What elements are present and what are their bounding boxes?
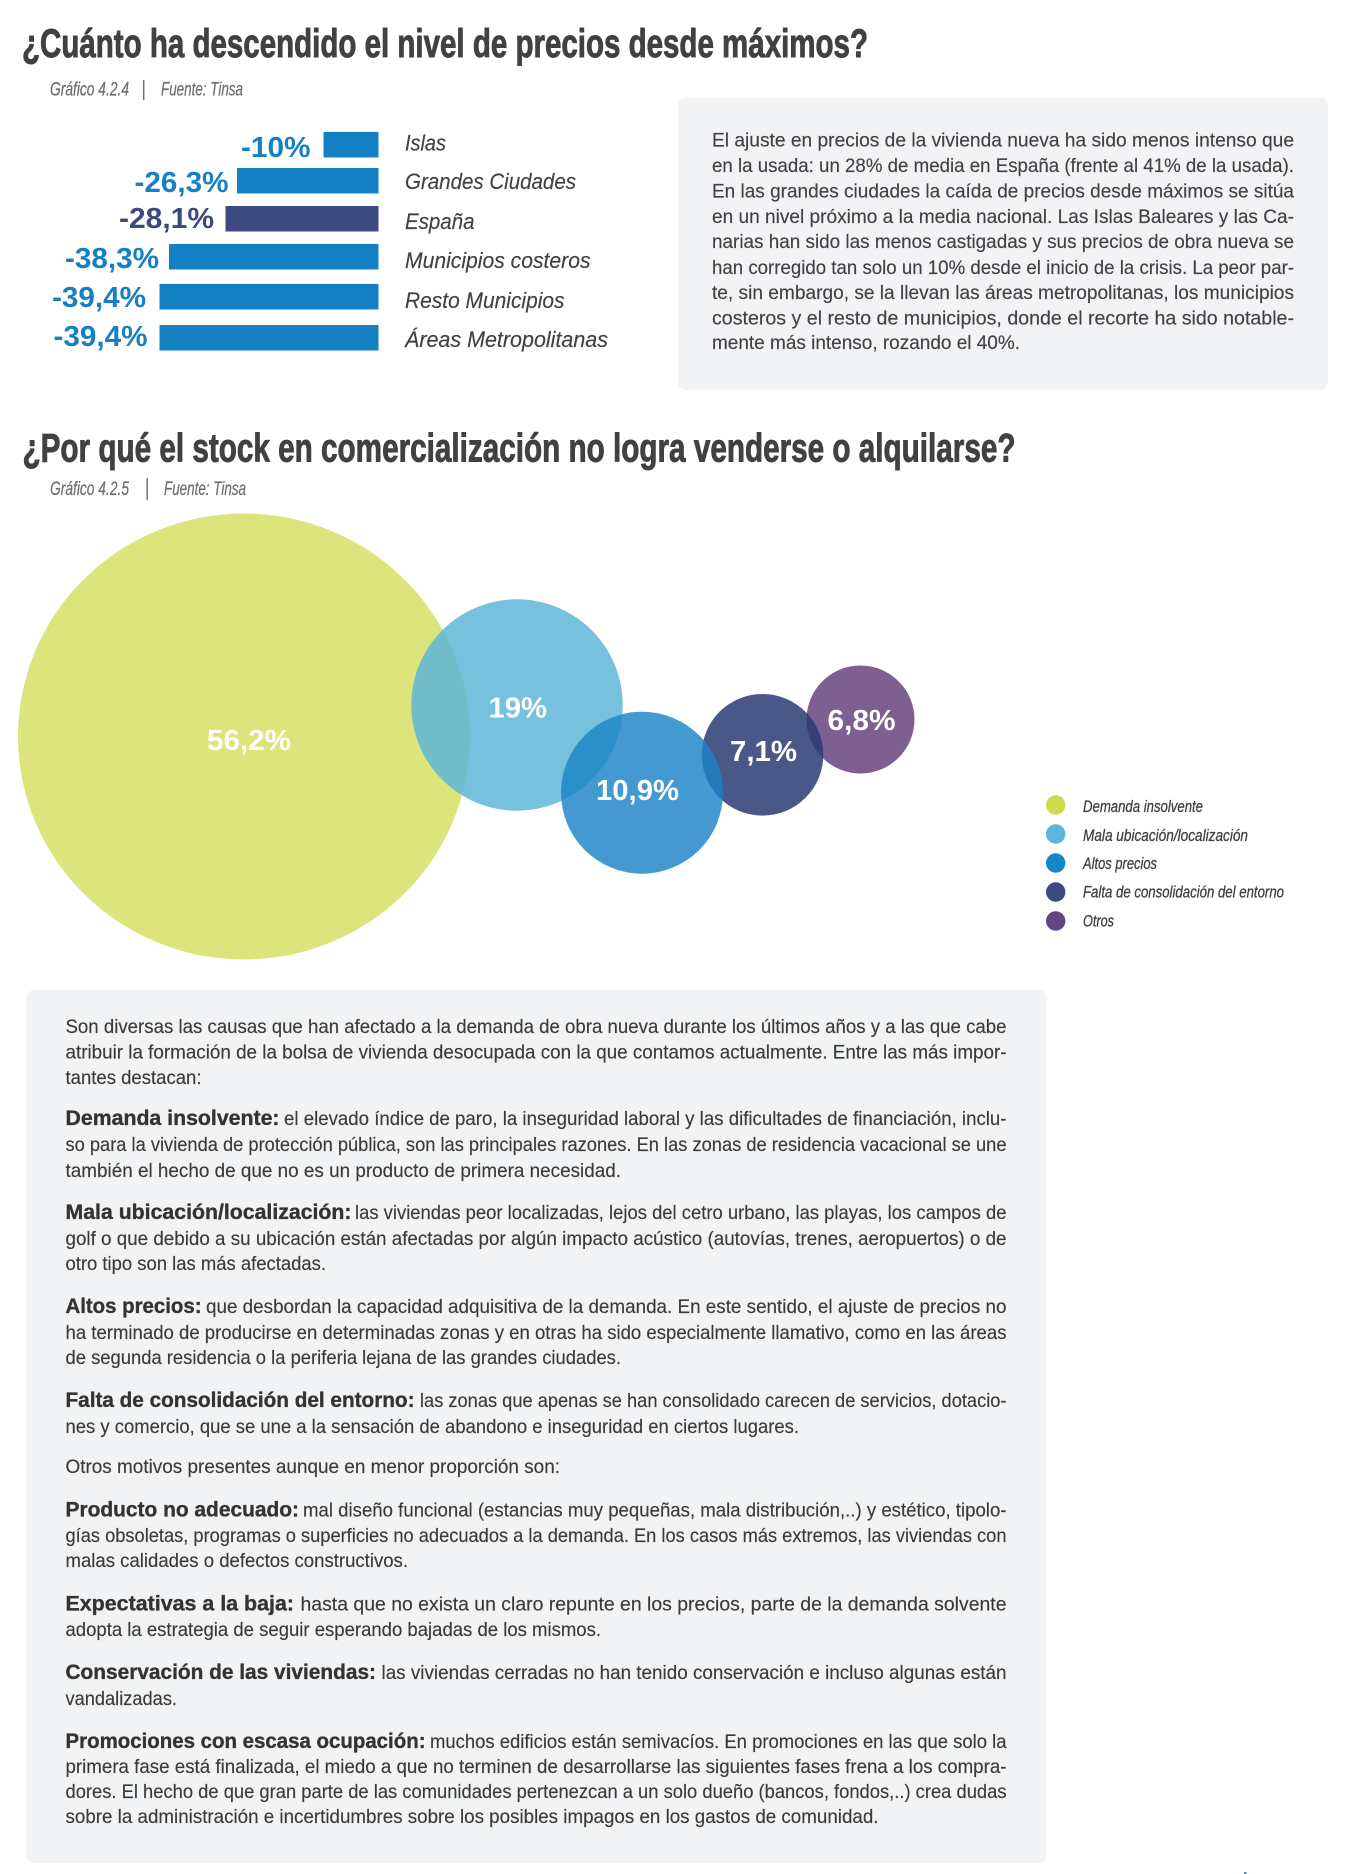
text block: Mala ubicación/localización: las viviendas peor localizadas, lejos del cetro urbano, las playas, los campos de [355,1202,1006,1224]
text block: Conservación de las viviendas: las viviendas cerradas no han tenido conservación e incluso algunas están [382,1662,1006,1684]
source line: chart 4.2.4: Gráfico 4.2.4 [50,80,129,100]
title: unsold stock: ¿Por qué el stock en comercialización no logra venderse o alquilarse? [22,426,1016,470]
legend item: Mala ubicación/localización: Mala ubicación/localización [1083,827,1248,845]
text block: Promociones con escasa ocupación [66,1730,1007,1828]
legend item: Demanda insolvente: Demanda insolvente [1083,798,1203,816]
text block: price commentary: han corregido tan solo un 10% desde el inicio de la crisis. La peor par- [712,257,1294,279]
text block: Altos precios: Altos precios: [66,1295,202,1318]
text block: Conservación de las viviendas [66,1661,1006,1710]
text block: price commentary: mente más intenso, rozando el 40%. [712,332,1020,354]
text block: Altos precios: ha terminado de producirse en determinadas zonas y en otras ha sido especialmente llamativo, como en las áreas [66,1322,1007,1344]
text block: Demanda insolvente: Demanda insolvente: [66,1107,280,1130]
bubble: Falta de consolidación 7,1% [702,694,823,816]
text block: Demanda insolvente: también el hecho de que no es un producto de primera necesidad. [66,1160,621,1182]
bar row: España: España [405,209,474,234]
text block: Promociones con escasa ocupación: dores. El hecho de que gran parte de las comunidades pertenezcan a un solo dueño (bancos, fondos,..) crea dudas [66,1781,1007,1803]
source line: chart 4.2.4: Fuente: Tinsa [161,80,243,100]
text block: Demanda insolvente [66,1107,1006,1182]
bar row: Islas: -10% [241,132,311,164]
text block: Demanda insolvente: el elevado índice de paro, la inseguridad laboral y las dificultades de financiación, inclu- [284,1108,1006,1130]
bubble: Altos precios 10,9%: 10,9% [596,775,679,807]
text block: Altos precios: de segunda residencia o la periferia lejana de las grandes ciudades. [66,1347,621,1369]
bubble: Mala ubicación 19% [411,599,623,811]
source line: chart 4.2.5: Gráfico 4.2.5 [50,479,129,500]
legend item: Otros: Otros [1083,912,1114,930]
bubble: Falta de consolidación 7,1%: 7,1% [730,736,797,768]
text block: Falta de consolidación del entorno: Falta de consolidación del entorno: [66,1389,414,1412]
legend item: Altos precios [1046,853,1157,873]
text block: Mala ubicación/localización [66,1201,1006,1275]
text block: introduction [66,1016,1006,1089]
legend item: Demanda insolvente [1046,795,1203,816]
text block: Producto no adecuado: mal diseño funcional (estancias muy pequeñas, mala distribución,..) y estético, tipolo- [303,1500,1006,1522]
legend item: Mala ubicación/localización [1046,824,1248,845]
text block: introduction: tantes destacan: [66,1067,202,1089]
bubble: Otros 6,8%: 6,8% [828,705,896,737]
text block: price commentary: te, sin embargo, se la llevan las áreas metropolitanas, los municipios [712,282,1294,304]
text block: introduction: atribuir la formación de la bolsa de vivienda desocupada con la que contamos actualmente. Entre las más impor- [66,1042,1006,1064]
text block: Mala ubicación/localización: Mala ubicación/localización: [66,1201,352,1224]
bubble: Otros 6,8% [806,666,914,774]
text block: Mala ubicación/localización: otro tipo son las más afectadas. [66,1253,326,1275]
source line: chart 4.2.4 [50,80,243,100]
text block: price commentary: en un nivel próximo a la media nacional. Las Islas Baleares y las Ca- [712,206,1294,228]
bar row: Grandes Ciudades: Grandes Ciudades [405,169,576,194]
text block: price commentary: El ajuste en precios de la vivienda nueva ha sido menos intenso que [712,130,1294,152]
bar row: España [119,203,474,235]
bar row: Áreas Metropolitanas [54,321,608,353]
text block: Expectativas a la baja: Expectativas a la baja: [66,1592,294,1616]
text block: Falta de consolidación del entorno [66,1389,1006,1438]
source line: chart 4.2.5: Fuente: Tinsa [164,479,246,500]
bubble: Demanda insolvente 56,2% [18,514,470,960]
bar row: Municipios costeros [65,243,590,275]
bubble: Demanda insolvente 56,2%: 56,2% [207,725,291,757]
text block: Producto no adecuado [66,1498,1006,1572]
text block: price commentary: En las grandes ciudades la caída de precios desde máximos se sitúa [712,180,1294,202]
text block: Promociones con escasa ocupación: Promociones con escasa ocupación: [66,1730,426,1753]
legend item: Altos precios: Altos precios [1082,855,1157,873]
bar row: Municipios costeros: Municipios costeros [405,248,590,273]
text block: introduction: Son diversas las causas que han afectado a la demanda de obra nueva durante los últimos años y a las que cabe [66,1016,1006,1038]
text block: Producto no adecuado: Producto no adecuado: [66,1498,299,1522]
text block: Promociones con escasa ocupación: muchos edificios están semivacíos. En promociones en las que solo la [430,1731,1007,1753]
text block: Altos precios [66,1295,1007,1369]
text block: Mala ubicación/localización: golf o que debido a su ubicación están afectadas por algún impacto acústico (autovías, trenes, aeropuertos) o de [66,1228,1006,1250]
text block: other reasons intro: Otros motivos presentes aunque en menor proporción son: [66,1456,560,1478]
bubble chart: reasons for unsold stock [18,514,914,960]
bar row: Grandes Ciudades: -26,3% [134,167,229,199]
bubble: Mala ubicación 19%: 19% [488,692,547,724]
source line: chart 4.2.5 [50,478,246,500]
legend [1046,795,1284,931]
bar row: Resto Municipios: -39,4% [52,282,146,314]
text block: Falta de consolidación del entorno: las zonas que apenas se han consolidado carecen de servicios, dotacio- [420,1390,1006,1412]
text block: price commentary: narias han sido las menos castigadas y sus precios de obra nueva se [712,231,1294,253]
legend item: Otros [1046,911,1114,931]
panel: causes [26,990,1046,1863]
text block: Expectativas a la baja [66,1592,1006,1641]
legend item: Falta de consolidación del entorno: Falta de consolidación del entorno [1083,884,1284,902]
bar row: España: -28,1% [119,203,214,235]
text block: price commentary: costeros y el resto de municipios, donde el recorte ha sido notable- [712,308,1294,330]
text block: Producto no adecuado: gías obsoletas, programas o superficies no adecuados a la demanda. En los casos más extremos, las viviendas con [66,1525,1006,1547]
text block: Conservación de las viviendas: vandalizadas. [66,1688,177,1710]
bar row: Islas [241,130,446,164]
text block: Falta de consolidación del entorno: nes y comercio, que se une a la sensación de abandono e inseguridad en ciertos lugares. [66,1416,799,1438]
text block: Conservación de las viviendas: Conservación de las viviendas: [66,1661,376,1684]
text block: Altos precios: que desbordan la capacidad adquisitiva de la demanda. En este sentido, el ajuste de precios no [206,1296,1007,1318]
text block: Demanda insolvente: so para la vivienda de protección pública, son las principales razones. En las zonas de residencia vacacional se une [66,1134,1006,1156]
text block: price commentary: en la usada: un 28% de media en España (frente al 41% de la usada). [712,155,1294,177]
text block: Expectativas a la baja: adopta la estrategia de seguir esperando bajadas de los mismos. [66,1619,601,1641]
text block: price commentary [712,130,1294,354]
title: price decline: ¿Cuánto ha descendido el nivel de precios desde máximos? [22,22,868,66]
text block: Expectativas a la baja: hasta que no exista un claro repunte en los precios, parte de la demanda solvente [300,1594,1006,1616]
text block: Producto no adecuado: malas calidades o defectos constructivos. [66,1550,408,1572]
text block: Promociones con escasa ocupación: primera fase está finalizada, el miedo a que no terminen de desarrollarse las siguientes fases frena a los compra- [66,1756,1006,1778]
text block: Promociones con escasa ocupación: sobre la administración e incertidumbres sobre los posibles impagos en los gastos de comunidad. [66,1806,878,1828]
bar row: Resto Municipios [52,282,564,314]
bubble: Altos precios 10,9% [561,712,723,874]
legend item: Falta de consolidación del entorno [1046,882,1284,902]
bar row: Resto Municipios: Resto Municipios [405,288,564,313]
bar row: Municipios costeros: -38,3% [65,243,159,275]
bar row: Islas: Islas [405,130,446,156]
bar row: Áreas Metropolitanas: -39,4% [54,321,148,353]
bar chart: price decline from peak [52,130,608,353]
bar row: Grandes Ciudades [134,167,576,199]
panel: price commentary [678,98,1328,390]
bar row: Áreas Metropolitanas: Áreas Metropolitanas [404,327,608,352]
